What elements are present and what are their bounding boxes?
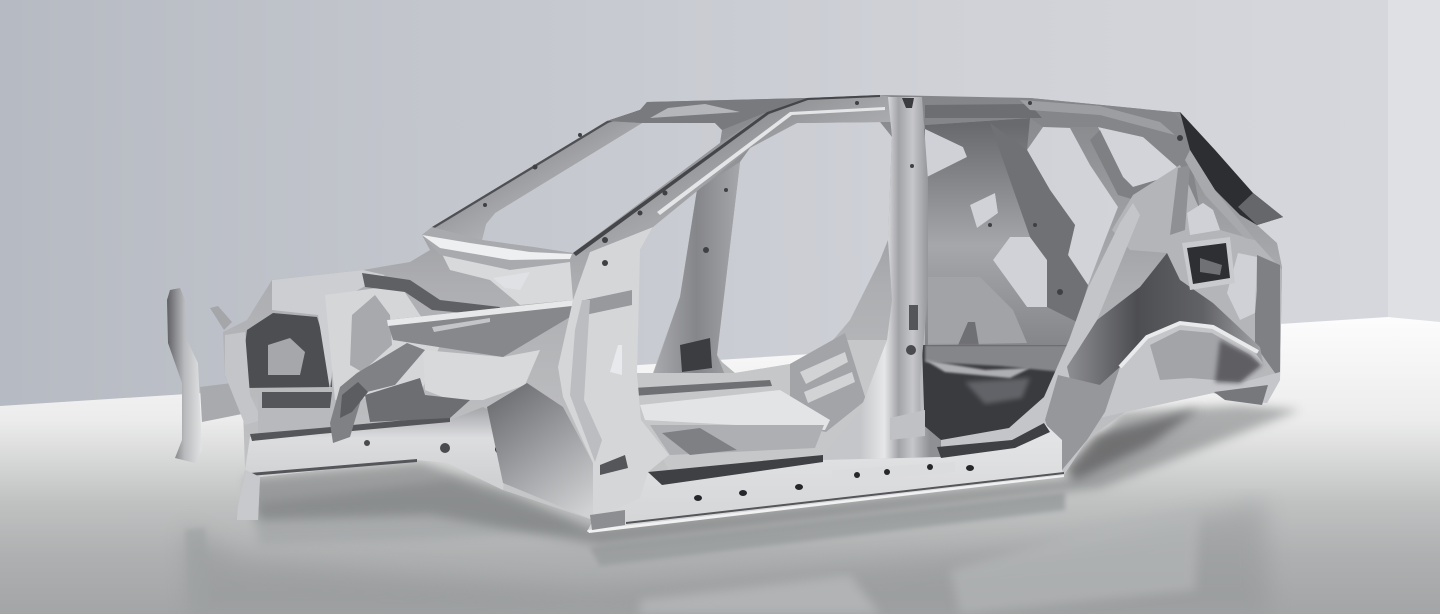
wheelhouse bracket bbox=[955, 322, 980, 352]
B-pillar bbox=[823, 97, 941, 460]
cowl band bbox=[422, 227, 573, 270]
reflective floor bbox=[0, 317, 1440, 614]
car body structure bbox=[167, 95, 1283, 533]
front strut tower dark cavity bbox=[210, 306, 340, 435]
A-pillar and roof rail bbox=[573, 95, 892, 256]
strut brace bracket bbox=[330, 343, 425, 443]
floor reflection of the car bbox=[185, 480, 1270, 614]
front longitudinal rail bbox=[237, 407, 510, 520]
front bumper beam bbox=[167, 288, 202, 463]
rear interior floor pan bbox=[922, 345, 1075, 440]
wheelhouse and rear floor bbox=[1100, 323, 1280, 418]
far side door pillar bbox=[653, 162, 740, 375]
rivet holes on pillars bbox=[483, 101, 1183, 295]
far side C-pillar bbox=[990, 123, 1088, 322]
fender support beam bbox=[387, 300, 573, 357]
fuel filler pocket bbox=[1182, 237, 1235, 290]
far side wheelhouse bbox=[928, 277, 1027, 345]
floor shadow under the car bbox=[245, 405, 1300, 545]
background wall bbox=[0, 0, 1440, 420]
windshield header bbox=[607, 98, 807, 130]
body side silhouette with window openings bbox=[223, 95, 1283, 532]
rocker sill bbox=[587, 423, 1064, 533]
lit apron bulge bbox=[423, 350, 540, 400]
rear flare panel bbox=[1045, 367, 1120, 470]
front door floor interior bbox=[633, 333, 887, 470]
quarter window inner trim bbox=[1090, 130, 1170, 200]
spoiler and tailgate flange bbox=[1180, 112, 1283, 240]
rear quarter dark panel bbox=[1058, 253, 1263, 432]
rear door near frame strip bbox=[941, 203, 1140, 475]
rear opening windows restored bbox=[1187, 203, 1257, 320]
A-pillar lower post bbox=[558, 227, 669, 520]
D-pillar upper panel bbox=[1112, 165, 1282, 380]
wheel arch lower apron bbox=[487, 383, 593, 520]
crash box bar bbox=[200, 382, 247, 422]
dark gusset behind bracket bbox=[365, 378, 470, 422]
windshield frame bbox=[432, 110, 642, 240]
far side panel behind rear door bbox=[923, 118, 1088, 345]
latch on far pillar bbox=[680, 338, 712, 372]
roof rail rear section bbox=[915, 97, 1200, 210]
upper engine bay panels bbox=[272, 250, 573, 400]
